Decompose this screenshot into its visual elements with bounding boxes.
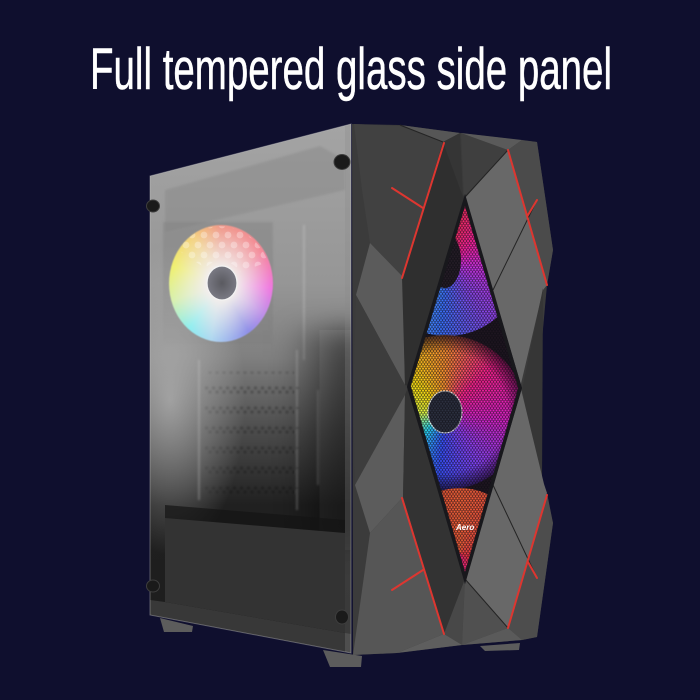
front panel [352, 124, 553, 655]
fan hex perforation [180, 226, 266, 268]
side fan RGB [168, 224, 274, 342]
left fog [150, 278, 237, 543]
upper fan [426, 206, 498, 336]
lower fan hub [428, 391, 462, 433]
facet seams [400, 125, 537, 628]
lower fan [410, 335, 518, 490]
front mesh with RGB fans [407, 194, 522, 584]
facets lower [465, 389, 547, 628]
interior details [163, 146, 345, 510]
feet [160, 618, 520, 667]
bottom fan [441, 488, 488, 572]
darker right side [287, 314, 351, 518]
bottom rail [150, 600, 351, 653]
side glass panel [150, 123, 352, 654]
brand logo: Aero [455, 523, 474, 532]
PSU shroud [165, 518, 345, 633]
panel outline [150, 124, 351, 653]
glass screws [146, 154, 350, 624]
side fan hub [207, 266, 237, 300]
PC case [146, 123, 553, 667]
red accent lines [392, 143, 547, 634]
glass right edge [345, 328, 351, 653]
upper fan hub [440, 238, 461, 288]
infographic canvas [93, 46, 610, 667]
facets upper [354, 124, 443, 277]
dark lower chamber [165, 505, 273, 526]
